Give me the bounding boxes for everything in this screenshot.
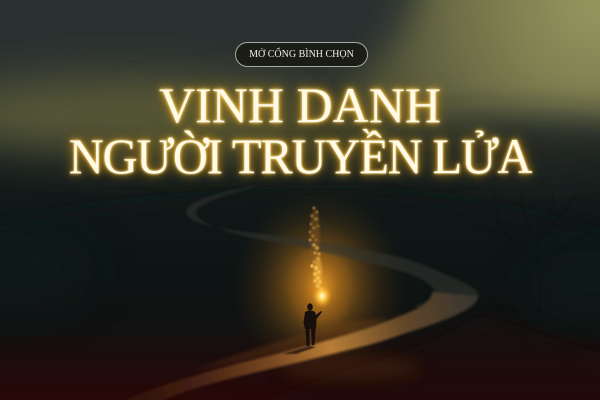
- badge: open voting: [235, 42, 368, 67]
- bare tree silhouette: [480, 190, 595, 320]
- title line 1: VINH DANH: [159, 77, 441, 133]
- far path: [186, 183, 478, 316]
- dark hillside: [0, 190, 600, 400]
- winding path: [120, 183, 478, 400]
- torch halo: [232, 187, 408, 383]
- torch flame: [312, 284, 332, 308]
- badge: open voting: MỞ CỔNG BÌNH CHỌN: [249, 49, 354, 60]
- lit grass bank: [190, 318, 390, 372]
- title: [66, 77, 536, 184]
- sparks rising from torch: [308, 206, 323, 291]
- title line 2: NGƯỜI TRUYỀN LỬA: [69, 128, 531, 184]
- foreground grass shade: [220, 315, 600, 400]
- bottom red tint: [0, 330, 600, 400]
- sky glow: [0, 0, 600, 170]
- ground shadow: [283, 346, 316, 354]
- teal side haze: [0, 225, 95, 315]
- person silhouette: [304, 303, 322, 346]
- near path: [120, 292, 478, 400]
